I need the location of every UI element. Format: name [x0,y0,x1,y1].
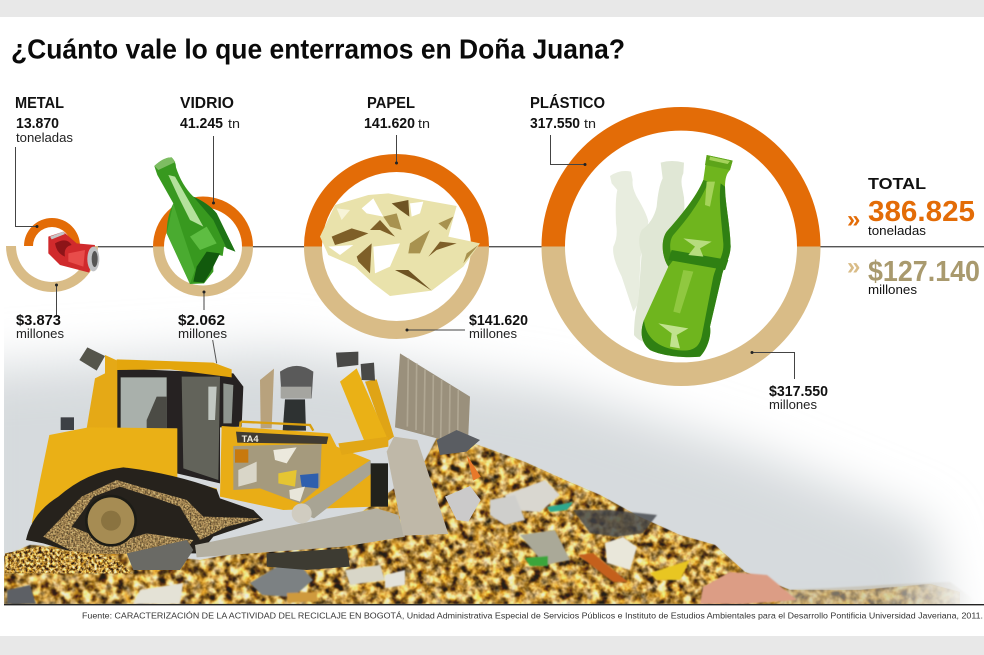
item: distant low rubbish fading right [780,582,960,604]
item: white sacks [505,480,560,512]
item: white paper [133,583,183,604]
arrow: orange chevrons: » [847,206,860,233]
title: ¿Cuánto vale lo que enterramos en Doña Juana? [11,34,625,64]
top grey band [0,0,984,17]
item: white pile left [4,556,5,568]
item: pink rock [700,572,797,604]
air cleaner [280,366,313,431]
panel: vidrio [153,95,253,341]
source note: Fuente: CARACTERIZACIÓN DE LA ACTIVIDAD DEL RECICLAJE EN BOGOTÁ, Unidad Administrativa Especial de Servicios Públicos e Instituto de Estudios Ambientales para el Desarrollo Pontificia Universidad Javeriana, 2011. [82,610,983,620]
icon: broken green bottle [154,157,235,284]
metal heading: METAL [15,95,64,112]
metal tons ring [24,218,80,246]
item: orange slab [578,553,628,582]
cab window [121,377,167,428]
orange flag [467,455,481,481]
total tons: 386.825 [868,196,975,228]
highlights [705,182,715,207]
panel: metal [6,95,99,341]
plastico value: millones [769,397,817,412]
metal value ring [6,246,98,292]
blade front [387,437,448,536]
metal tons: 13.870 [16,116,59,132]
plastico tons: tn [584,116,596,131]
item: grey bag in front [250,567,314,598]
metal value [16,313,64,341]
item: white lump [605,537,637,570]
rear pillar and lamp [61,347,117,430]
metal tons [16,116,73,145]
item: cardboard box [287,592,317,603]
cab door glass [182,377,220,480]
papel value [469,313,528,341]
blade back plate [395,353,470,440]
plastico rings [542,107,820,386]
sky haze [0,350,950,640]
vidrio tons: 41.245 [180,116,223,132]
cab roof [117,359,232,377]
faded bottle middle [634,161,684,343]
drive sprocket wheel [85,495,137,547]
papel value: $141.620 [469,313,528,329]
plastico value [769,384,828,412]
papel heading: PAPEL [367,95,415,112]
panel: total [847,176,980,297]
icon: crumpled paper [320,193,480,296]
exhaust stack [260,369,274,428]
papel value: millones [469,326,517,341]
papel leaders [395,135,465,332]
plastico value: $317.550 [769,384,828,400]
photo base line [4,604,984,605]
arrow: tan chevrons: » [847,253,860,280]
photo: bulldozer on landfill [4,332,969,604]
axis line [90,246,984,247]
rear track arch [26,467,263,553]
total value unit: millones [868,282,918,297]
papel tons: 141.620 [364,116,415,132]
panel: papel [304,95,528,341]
item group: large rubbish pieces [5,480,984,604]
main engine body [220,426,373,510]
metal leaders [16,147,58,317]
icon: crushed can [48,232,99,273]
under-bulldozer shadow and dark bag [127,540,193,570]
antenna [213,340,217,363]
TAH logo: TA4 [242,434,259,444]
bottom grey band [0,636,984,655]
diagonal brace [303,460,371,518]
hydraulic spring [371,463,388,507]
item: dark plastic bag [573,510,657,537]
plastico leaders [550,135,794,379]
total heading: TOTAL [868,176,926,193]
panel: plastico [530,95,828,412]
guard rail [240,422,313,431]
metal tons: toneladas [16,130,73,145]
vidrio rings [153,196,253,296]
icon: plastic bottles [610,155,733,357]
item: yellow sheet [650,560,690,580]
plastico heading: PLÁSTICO [530,95,605,112]
green bottle body [642,155,733,357]
vidrio tons: tn [228,116,240,131]
body stripe [236,432,328,444]
white sack by blade [445,486,481,522]
metal value: $3.873 [16,313,61,329]
lamps [336,352,358,367]
papel rings [304,154,489,339]
lift cylinders [336,352,394,455]
total tons unit: toneladas [868,223,927,238]
vidrio value: $2.062 [178,313,225,329]
faded bottle left [610,171,648,312]
bulldozer, drawn in 3× crop units [5,340,481,573]
item: teal plastic [547,502,573,512]
outline shadows [642,183,731,357]
item: grey lump left [7,585,36,604]
vidrio leaders [202,136,215,310]
metal value: millones [16,326,64,341]
plastico tons: 317.550 [530,116,580,132]
rear hull [32,427,218,523]
dirty side panel [233,444,322,503]
cab frame [115,368,243,483]
mud foreground under tracks [5,547,133,573]
vidrio heading: VIDRIO [180,95,234,112]
garbage pile [4,432,984,604]
papel tons: tn [418,116,430,131]
dark bags on pile [437,430,480,455]
muddy track [43,480,260,554]
cap [705,155,733,170]
item: green bottle [525,556,548,566]
joint [292,503,312,523]
vidrio value: millones [178,326,228,341]
push arm [195,508,405,557]
vidrio value [178,313,228,341]
